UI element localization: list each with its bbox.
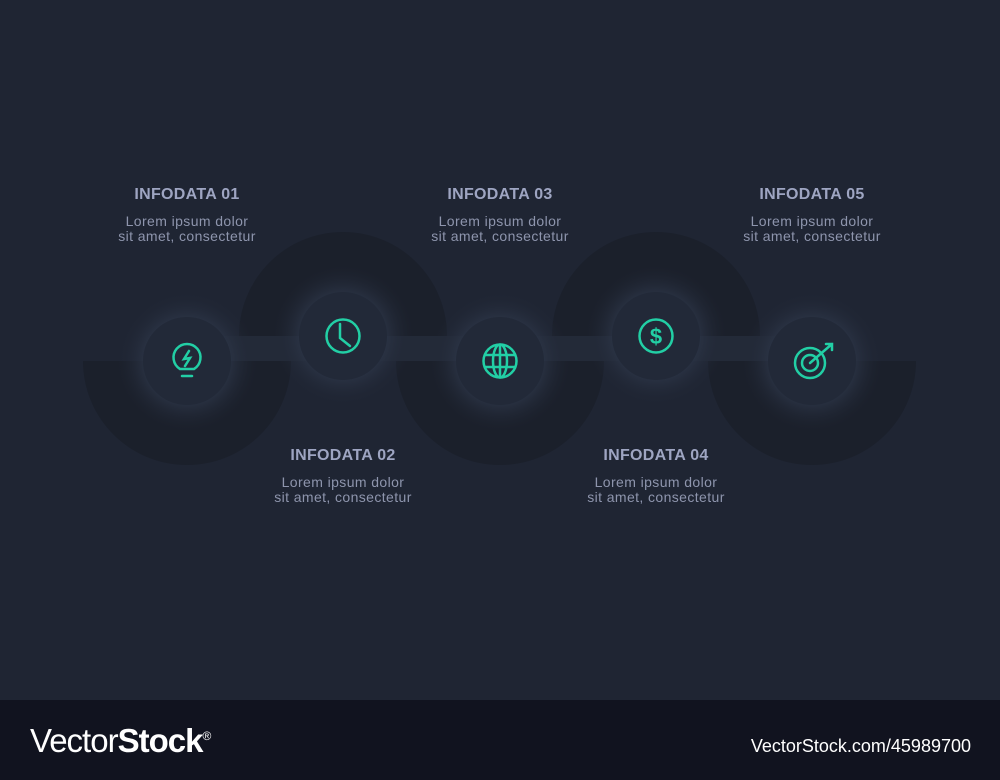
connecting band (187, 336, 812, 361)
text: infodata 03 (431, 186, 569, 244)
node disks (143, 292, 856, 405)
glows (117, 266, 882, 431)
text: infodata 02: sit amet, consectetur (274, 489, 412, 505)
icon: globe (484, 344, 516, 378)
text: infodata 03: INFODATA 03 (447, 186, 553, 203)
text: infodata 01 (118, 186, 256, 244)
text: infodata 03: sit amet, consectetur (431, 228, 569, 244)
text: infodata 05 (743, 186, 881, 244)
footer (0, 700, 1000, 780)
text: infodata 04: Lorem ipsum dolor (595, 474, 717, 490)
icon: bulb (174, 344, 200, 376)
text: infodata 05: INFODATA 05 (759, 186, 865, 203)
text: infodata 05: sit amet, consectetur (743, 228, 881, 244)
text: infodata 04 (587, 447, 725, 505)
text: infodata 02: INFODATA 02 (290, 447, 396, 464)
text: infodata 01: Lorem ipsum dolor (126, 213, 248, 229)
text: infodata 04: INFODATA 04 (603, 447, 709, 464)
icon: clock (326, 320, 360, 352)
text: infodata 03: Lorem ipsum dolor (439, 213, 561, 229)
text: infodata 05: Lorem ipsum dolor (751, 213, 873, 229)
logo: VectorStock® (30, 722, 210, 759)
icon: dollar: $ (650, 324, 662, 349)
icon: dollar (640, 320, 672, 352)
rings (83, 232, 916, 465)
icon: target (795, 344, 832, 378)
text: infodata 02 (274, 447, 412, 505)
text: infodata 04: sit amet, consectetur (587, 489, 725, 505)
text: infodata 01: sit amet, consectetur (118, 228, 256, 244)
url: VectorStock.com/45989700 (751, 736, 971, 756)
text: infodata 01: INFODATA 01 (134, 186, 240, 203)
text: infodata 02: Lorem ipsum dolor (282, 474, 404, 490)
